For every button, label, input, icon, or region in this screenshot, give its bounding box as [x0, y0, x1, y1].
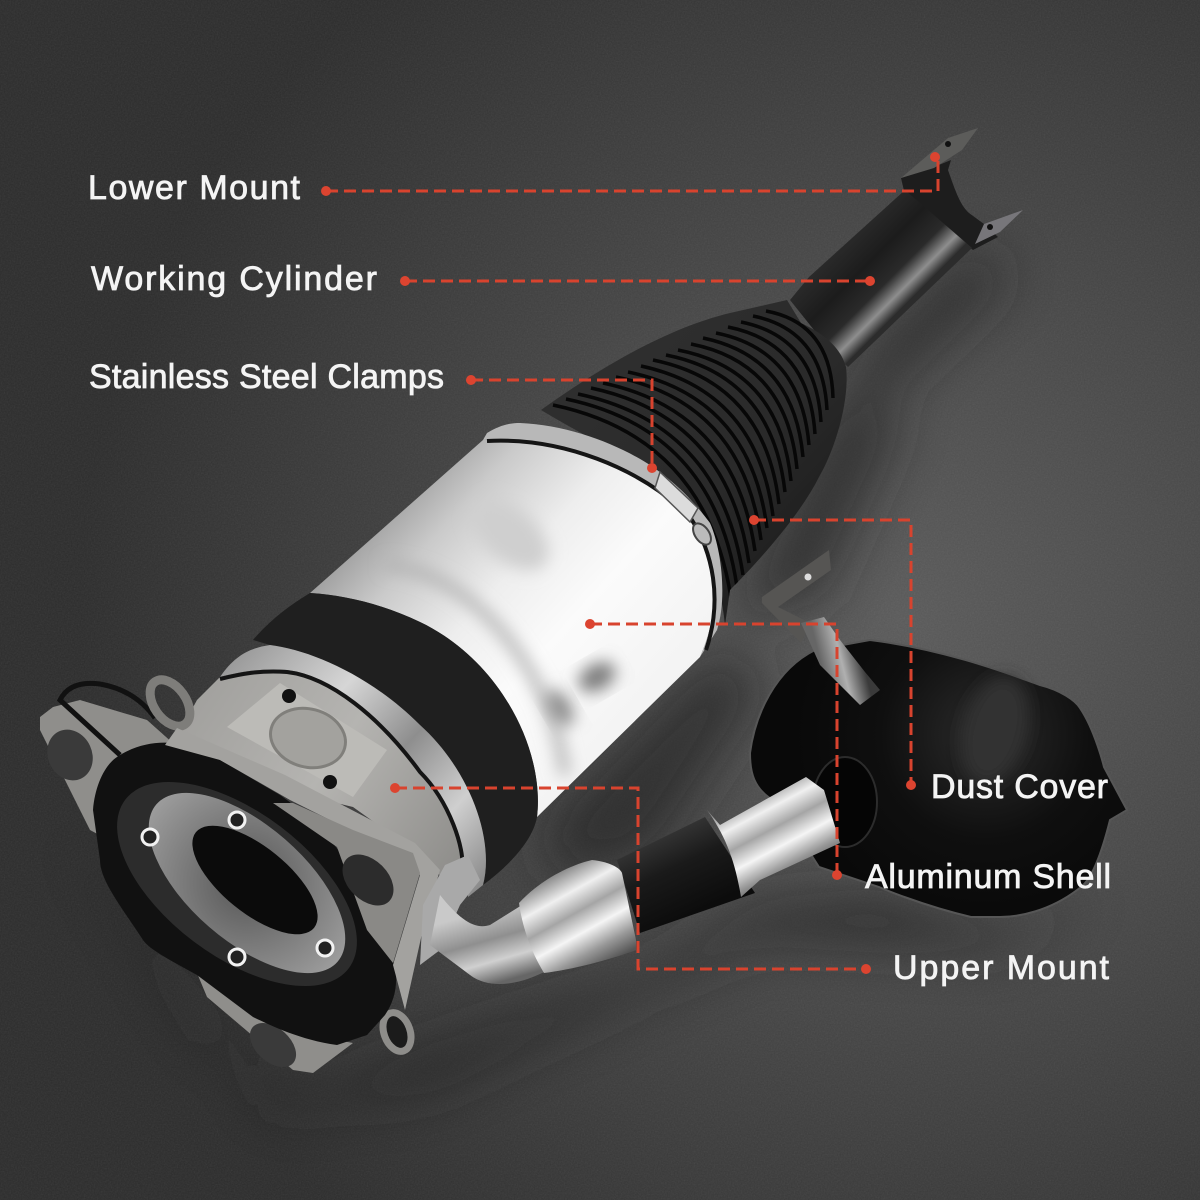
ear hole [39, 722, 101, 788]
tank valve [801, 617, 880, 705]
bore metal [118, 760, 376, 1006]
label: Stainless Steel Clamps [89, 358, 657, 473]
lower mount fork [901, 128, 1023, 250]
bore bolts [142, 812, 333, 965]
upper mount housing [177, 669, 462, 880]
label: Lower Mount [88, 152, 940, 207]
flange right block [273, 803, 420, 963]
wire loop [60, 683, 155, 755]
bottom ear hole [242, 1014, 304, 1076]
rubber hose [617, 817, 755, 933]
label: Lower Mount: Lower Mount [88, 169, 301, 207]
tank port [813, 757, 877, 847]
hose crimp right [707, 777, 840, 897]
working cylinder rod [790, 190, 972, 367]
label: Aluminum Shell [585, 619, 1111, 896]
label: Upper Mount: Upper Mount [893, 949, 1110, 987]
rubber sleeve [253, 593, 538, 885]
bore hole [175, 807, 335, 953]
lifting eye top [142, 673, 198, 733]
stainless steel clamp [483, 423, 722, 657]
label: Dust Cover: Dust Cover [931, 768, 1108, 806]
plate hole bottom [323, 775, 337, 789]
pipe fitting [420, 855, 480, 965]
label: Working Cylinder: Working Cylinder [91, 260, 377, 298]
tank highlight [950, 669, 1040, 791]
label: Working Cylinder [91, 260, 875, 298]
lower steel ring [220, 645, 486, 897]
valve bracket [762, 550, 831, 643]
bellows ribs [553, 311, 833, 598]
clamp buckle [655, 472, 698, 522]
flange face band [165, 728, 440, 1010]
aluminum shell [310, 439, 714, 817]
flange bottom ear [197, 973, 353, 1076]
label: Stainless Steel Clamps: Stainless Steel Clamps [89, 358, 444, 396]
port recess [264, 700, 352, 776]
label: Aluminum Shell: Aluminum Shell [865, 858, 1111, 896]
right block hole [333, 845, 403, 915]
black gasket ring [93, 743, 396, 1045]
inner bore flange [82, 742, 392, 1026]
flange top-left ear [39, 683, 175, 837]
plate hole top [282, 689, 296, 703]
elbow pipe [430, 895, 548, 984]
port plate [227, 683, 387, 797]
clamp screw [689, 520, 715, 548]
shell shading [385, 486, 621, 775]
dust cover bellows [541, 300, 847, 625]
air reservoir tank [750, 640, 1127, 917]
hose crimp left [519, 860, 636, 973]
label: Dust Cover [749, 515, 1108, 806]
cast shadows [60, 250, 1100, 1110]
product: air strut assembly [39, 128, 1127, 1110]
black seal [220, 671, 462, 868]
label: Upper Mount [390, 783, 1110, 987]
lifting eye bottom [378, 1009, 416, 1055]
